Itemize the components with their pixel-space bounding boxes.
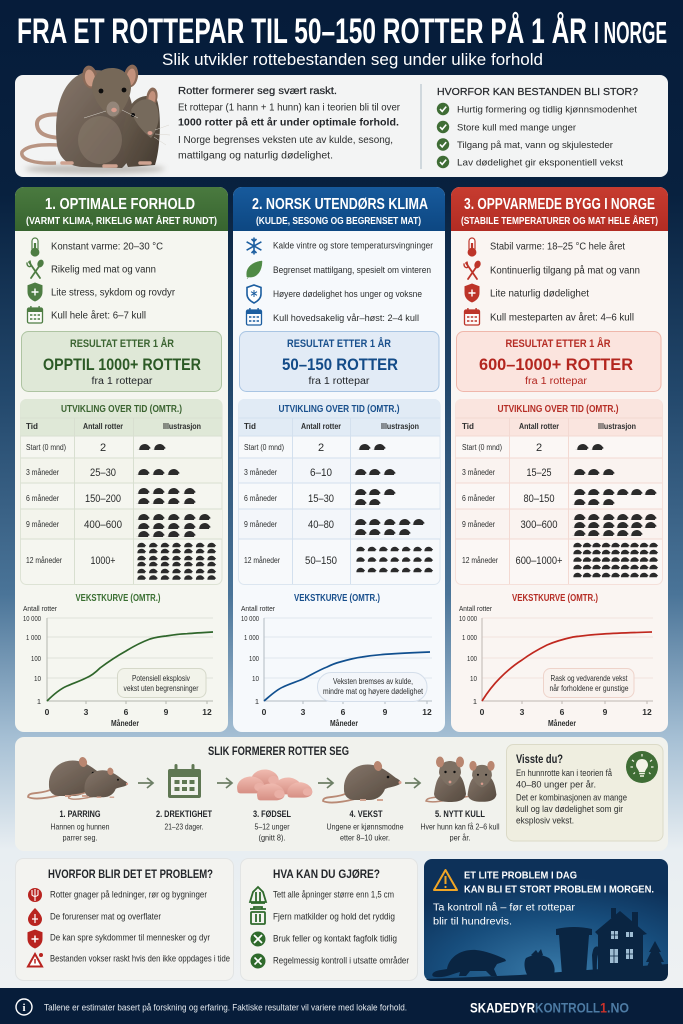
table: column 1: 12 måneder <box>26 556 62 565</box>
table: column 2: Antall rotter <box>301 421 342 431</box>
growth chart: column 2: 6 <box>341 707 346 717</box>
table: column 2 <box>238 399 440 584</box>
intro text block: I Norge begrenses veksten ute av kulde, sesong, <box>178 135 393 146</box>
callout text <box>433 902 576 928</box>
heading: actions: HVA KAN DU GJØRE? <box>273 867 380 881</box>
growth chart: column 1: 6 <box>124 707 129 717</box>
growth chart: column 2: 3 <box>301 707 306 717</box>
header: column 1 <box>15 187 228 231</box>
growth chart: column 2: 10 <box>252 674 259 683</box>
feature list: column 1: Rikelig med mat og vann <box>51 264 156 276</box>
growth chart: column 3: 10 000 <box>459 614 477 623</box>
callout: column 3 chart <box>544 668 634 698</box>
feature list: column 3: Kontinuerlig tilgang på mat og vann <box>490 264 640 276</box>
table: column 1: 25–30 <box>90 467 116 479</box>
callout: did you know: eksplosiv vekst. <box>516 816 574 826</box>
step 4: growth <box>323 760 404 842</box>
feature list: column 2: Høyere dødelighet hos unger og voksne <box>273 289 422 299</box>
growth chart: column 1: 10 <box>34 674 41 683</box>
heading: reproduction: SLIK FORMERER ROTTER SEG <box>208 744 349 758</box>
growth chart: column 3: 100 <box>467 654 477 663</box>
panel: intro <box>15 75 668 177</box>
panel: column 2 Norwegian outdoor climate <box>233 187 445 732</box>
step 1: mating: parrer seg. <box>62 832 98 842</box>
feature list: column 3: Stabil varme: 18–25 °C hele året <box>490 240 625 252</box>
callout: column 1 chart: vekst uten begrensninger <box>124 684 199 693</box>
panel: column 3 heated buildings <box>451 187 668 732</box>
brand logo <box>470 1000 629 1016</box>
callout: did you know: En hunnrotte kan i teorien få <box>516 768 612 778</box>
growth chart: column 2: 12 <box>422 707 432 717</box>
table: column 1: Tid <box>26 421 38 431</box>
growth chart: column 2: Antall rotter <box>241 604 275 613</box>
growth chart: column 3: 6 <box>560 707 565 717</box>
feature list: column 1: Lite stress, sykdom og rovdyr <box>51 288 176 298</box>
table: column 3: Start (0 mnd) <box>462 443 502 452</box>
table: column 3: 15–25 <box>526 467 552 479</box>
header: column 2 <box>233 187 445 231</box>
feature list: column 3: Kull mesteparten av året: 4–6 kull <box>490 312 634 324</box>
table: column 2: 2 <box>318 442 324 454</box>
checklist: Hurtig formering og tidlig kjønnsmodenhet <box>457 104 637 116</box>
step 5: new litter: Hver hunn kan få 2–6 kull <box>420 822 500 832</box>
step 2: gestation: 2. DREKTIGHET <box>156 809 212 820</box>
heading: problem: HVORFOR BLIR DET ET PROBLEM? <box>48 867 213 881</box>
feature list: column 3 <box>464 238 640 325</box>
step 2: gestation <box>156 764 212 832</box>
step 3: birth <box>237 769 312 842</box>
arrow 1 <box>138 778 153 788</box>
table: column 2: Tid <box>244 421 256 431</box>
table: column 3 <box>456 399 662 584</box>
feature list: column 1: Kull hele året: 6–7 kull <box>51 310 146 322</box>
panel: column 1 optimal conditions <box>15 187 228 732</box>
growth chart: column 1 <box>23 593 213 728</box>
table: column 1: Illustrasjon <box>163 421 201 431</box>
step 4: growth: Ungene er kjønnsmodne <box>326 822 404 832</box>
feature list: column 2: Kalde vintre og store temperatursvingninger <box>273 240 433 250</box>
table: column 2: 9 måneder <box>244 520 277 529</box>
panel: what you can do <box>240 858 418 980</box>
brand logo: KONTROLL <box>535 1000 600 1016</box>
action list: Bruk feller og kontakt fagfolk tidlig <box>273 934 397 944</box>
growth chart: column 3: 10 <box>470 674 477 683</box>
icon: info <box>16 999 32 1015</box>
result box: column 2: 50–150 ROTTER <box>282 355 398 374</box>
growth chart: column 1: 1 000 <box>26 633 41 642</box>
callout: column 3 chart: Rask og vedvarende vekst <box>550 674 628 683</box>
panel: call to action <box>424 859 668 981</box>
table: column 3: 600–1000+ <box>516 555 562 567</box>
problem list: Bestanden vokser raskt hvis den ikke oppdages i tide <box>50 954 230 964</box>
feature list: column 3: Lite naturlig dødelighet <box>490 288 589 300</box>
table: column 1: 3 måneder <box>26 468 59 477</box>
growth chart: column 3: Antall rotter <box>459 604 492 613</box>
step 1: mating: 1. PARRING <box>60 809 100 820</box>
result box: column 2: RESULTAT ETTER 1 ÅR <box>287 337 391 350</box>
result box: column 3 <box>456 332 661 392</box>
feature list: column 2 <box>246 238 433 325</box>
feature list: column 2: Kull hovedsakelig vår–høst: 2–4 kull <box>273 313 419 323</box>
growth chart: column 2: 100 <box>249 654 259 663</box>
feature list: column 2: Begrenset mattilgang, spesielt om vinteren <box>273 265 431 275</box>
brand logo: .NO <box>607 1000 629 1016</box>
icon: info: i <box>22 1002 26 1014</box>
brand logo: SKADEDYR <box>470 1000 535 1016</box>
header: column 2: (KULDE, SESONG OG BEGRENSET MAT) <box>256 216 421 227</box>
table: column 1: 150–200 <box>85 493 121 505</box>
icon: light bulb <box>626 751 658 783</box>
table: column 2: 50–150 <box>305 555 337 567</box>
header: column 1: 1. OPTIMALE FORHOLD <box>45 196 195 213</box>
callout: column 1 chart: Potensiell eksplosiv <box>132 674 190 683</box>
rat pictogram rows: column 1 <box>136 444 216 580</box>
step 5: new litter: per år. <box>450 832 470 842</box>
growth chart: column 3: 0 <box>480 707 485 717</box>
table: column 1: 400–600 <box>84 519 122 531</box>
growth chart: column 2: 0 <box>262 707 267 717</box>
growth chart: column 1: Måneder <box>111 718 140 728</box>
table: column 2: UTVIKLING OVER TID (OMTR.) <box>278 404 400 415</box>
intro text block <box>178 85 401 162</box>
table: column 3: 6 måneder <box>462 494 495 503</box>
action list: Regelmessig kontroll i utsatte områder <box>273 956 409 966</box>
growth chart: column 2: 10 000 <box>241 614 259 623</box>
header: column 3 <box>451 187 668 231</box>
rat pictogram rows: column 3 <box>572 444 658 577</box>
table: column 3: UTVIKLING OVER TID (OMTR.) <box>498 404 618 415</box>
intro text block: 1000 rotter på ett år under optimale forhold. <box>178 116 399 128</box>
action list: Tett alle åpninger større enn 1,5 cm <box>273 890 394 900</box>
problem list: De forurenser mat og overflater <box>50 912 161 922</box>
growth chart: column 1: Antall rotter <box>23 604 57 613</box>
growth chart: column 1: 3 <box>84 707 89 717</box>
table: column 2: 3 måneder <box>244 468 277 477</box>
step 3: birth: (gnitt 8). <box>258 832 286 842</box>
intro text block: Et rottepar (1 hann + 1 hunn) kan i teorien bli til over <box>178 102 401 114</box>
table: column 2: 12 måneder <box>244 556 280 565</box>
growth chart: column 2: VEKSTKURVE (OMTR.) <box>294 593 380 604</box>
callout: column 2 chart: mindre mat og høyere dødelighet <box>323 687 424 696</box>
step 4: growth: etter 8–10 uker. <box>340 832 390 842</box>
table: column 3: 12 måneder <box>462 556 498 565</box>
disclaimer: Tallene er estimater basert på forskning og erfaring. Faktiske resultater vil variere med lokale forhold. <box>44 1002 407 1014</box>
step 3: birth: 3. FØDSEL <box>253 809 291 820</box>
step 4: growth: 4. VEKST <box>350 809 383 820</box>
growth chart: column 3: 12 <box>642 707 652 717</box>
result box: column 1: OPPTIL 1000+ ROTTER <box>43 355 201 374</box>
growth chart: column 3: 3 <box>520 707 525 717</box>
rat pictogram rows: column 2 <box>354 444 433 572</box>
feature list: column 1 <box>27 238 176 323</box>
growth chart: column 3: 1 000 <box>462 633 477 642</box>
table: column 1: Antall rotter <box>83 421 124 431</box>
checklist: Lav dødelighet gir eksponentiell vekst <box>457 158 623 168</box>
silhouette scene: rat, bag, bin and house <box>426 908 668 981</box>
result box: column 1: RESULTAT ETTER 1 ÅR <box>70 337 174 350</box>
subtitle: Slik utvikler rottebestanden seg under ulike forhold <box>162 50 543 69</box>
table: column 3: 9 måneder <box>462 520 495 529</box>
growth chart: column 3: 9 <box>603 707 608 717</box>
problem list: Rotter gnager på ledninger, rør og bygninger <box>50 890 207 900</box>
table: column 1: 2 <box>100 442 106 454</box>
table: column 1: 6 måneder <box>26 494 59 503</box>
growth chart: column 1: 9 <box>164 707 169 717</box>
growth chart: column 1: VEKSTKURVE (OMTR.) <box>76 593 160 604</box>
checklist <box>437 103 637 168</box>
growth chart: column 3: Måneder <box>548 718 577 728</box>
growth chart: column 2: Måneder <box>330 718 359 728</box>
table: column 3: Tid <box>462 421 474 431</box>
callout: column 3 chart: når forholdene er gunstige <box>550 684 629 693</box>
intro text block: Rotter formerer seg svært raskt. <box>178 85 337 97</box>
growth chart: column 1: 0 <box>45 707 50 717</box>
result box: column 3: fra 1 rottepar <box>525 376 588 387</box>
growth chart: column 1: 100 <box>31 654 41 663</box>
table: column 2: Illustrasjon <box>381 421 419 431</box>
callout: did you know: Det er kombinasjonen av mange <box>516 792 627 802</box>
illustration: two rats <box>22 63 170 174</box>
growth chart: column 2: 1 <box>255 697 259 706</box>
header: column 2: 2. NORSK UTENDØRS KLIMA <box>252 196 428 213</box>
result box: column 2: fra 1 rottepar <box>308 376 370 387</box>
step 1: mating <box>28 756 128 842</box>
footer <box>0 988 683 1024</box>
feature list: column 1: Konstant varme: 20–30 °C <box>51 242 163 252</box>
callout: did you know: 40–80 unger per år. <box>516 780 596 790</box>
callout text: Ta kontroll nå – før et rottepar <box>433 902 576 914</box>
callout: column 1 chart <box>118 668 206 698</box>
table: column 2: 40–80 <box>308 519 334 531</box>
callout text: blir til hundrevis. <box>433 916 512 928</box>
growth chart: column 2: 9 <box>383 707 388 717</box>
callout: did you know <box>506 744 663 841</box>
checklist: Store kull med mange unger <box>457 122 576 134</box>
intro text block: mattilgang og naturlig dødelighet. <box>178 150 333 162</box>
table: column 3: 3 måneder <box>462 468 495 477</box>
header: column 1: (VARMT KLIMA, RIKELIG MAT ÅRET RUNDT) <box>26 214 217 227</box>
callout: did you know: kull og lav dødelighet som gir <box>516 804 623 814</box>
brand logo: 1 <box>600 1000 607 1016</box>
action list: Fjern matkilder og hold det ryddig <box>273 912 395 922</box>
table: column 2: 6 måneder <box>244 494 277 503</box>
table: column 1: Start (0 mnd) <box>26 443 66 452</box>
table: column 2: Start (0 mnd) <box>244 443 284 452</box>
step 5: new litter <box>420 756 500 842</box>
growth chart: column 1: 10 000 <box>23 614 41 623</box>
table: column 1 <box>20 399 222 584</box>
growth chart: column 3: 1 <box>473 697 477 706</box>
callout: did you know: Visste du? <box>516 752 563 766</box>
checklist: Tilgang på mat, vann og skjulesteder <box>457 140 613 151</box>
result box: column 1: fra 1 rottepar <box>92 376 153 387</box>
growth chart: column 2 <box>241 593 432 728</box>
arrow 3 <box>318 778 333 788</box>
result box: column 1 <box>22 332 222 392</box>
arrow 2 <box>217 778 232 788</box>
growth chart: column 3 <box>459 593 653 728</box>
table: column 2: 15–30 <box>308 493 334 505</box>
table: column 3: 2 <box>536 442 542 454</box>
callout: column 2 chart <box>318 672 427 702</box>
table: column 3: 80–150 <box>524 493 554 505</box>
table: column 1: UTVIKLING OVER TID (OMTR.) <box>61 404 182 415</box>
step 5: new litter: 5. NYTT KULL <box>435 809 485 820</box>
table: column 3: Illustrasjon <box>598 421 636 431</box>
growth chart: column 1: 1 <box>37 697 41 706</box>
callout headline: ET LITE PROBLEM I DAG <box>464 870 577 882</box>
panel: why it is a problem <box>16 858 234 980</box>
arrow 4 <box>405 778 420 788</box>
table: column 3: 300–600 <box>520 519 558 531</box>
callout headline: KAN BLI ET STORT PROBLEM I MORGEN. <box>464 884 654 896</box>
action list <box>250 887 409 968</box>
table: column 2: 6–10 <box>310 467 332 479</box>
table: column 1: 9 måneder <box>26 520 59 529</box>
result box: column 3: RESULTAT ETTER 1 ÅR <box>506 337 611 350</box>
growth chart: column 1: 12 <box>202 707 212 717</box>
problem list: De kan spre sykdommer til mennesker og dyr <box>50 932 210 944</box>
callout: column 2 chart: Veksten bremses av kulde, <box>333 677 413 686</box>
problem list <box>28 888 230 966</box>
heading: why large: HVORFOR KAN BESTANDEN BLI STOR? <box>437 86 638 98</box>
result box: column 2 <box>240 332 439 392</box>
growth chart: column 2: 1 000 <box>244 633 259 642</box>
table: column 3: Antall rotter <box>519 421 560 431</box>
panel: how rats reproduce <box>15 737 668 851</box>
result box: column 3: 600–1000+ ROTTER <box>479 355 633 374</box>
step 2: gestation: 21–23 dager. <box>164 822 204 832</box>
step 3: birth: 5–12 unger <box>254 822 290 832</box>
step 1: mating: Hannen og hunnen <box>50 822 110 832</box>
growth chart: column 3: VEKSTKURVE (OMTR.) <box>512 593 598 604</box>
table: column 1: 1000+ <box>90 555 116 567</box>
icon: warning triangle <box>434 870 457 890</box>
callout headline <box>464 870 654 896</box>
